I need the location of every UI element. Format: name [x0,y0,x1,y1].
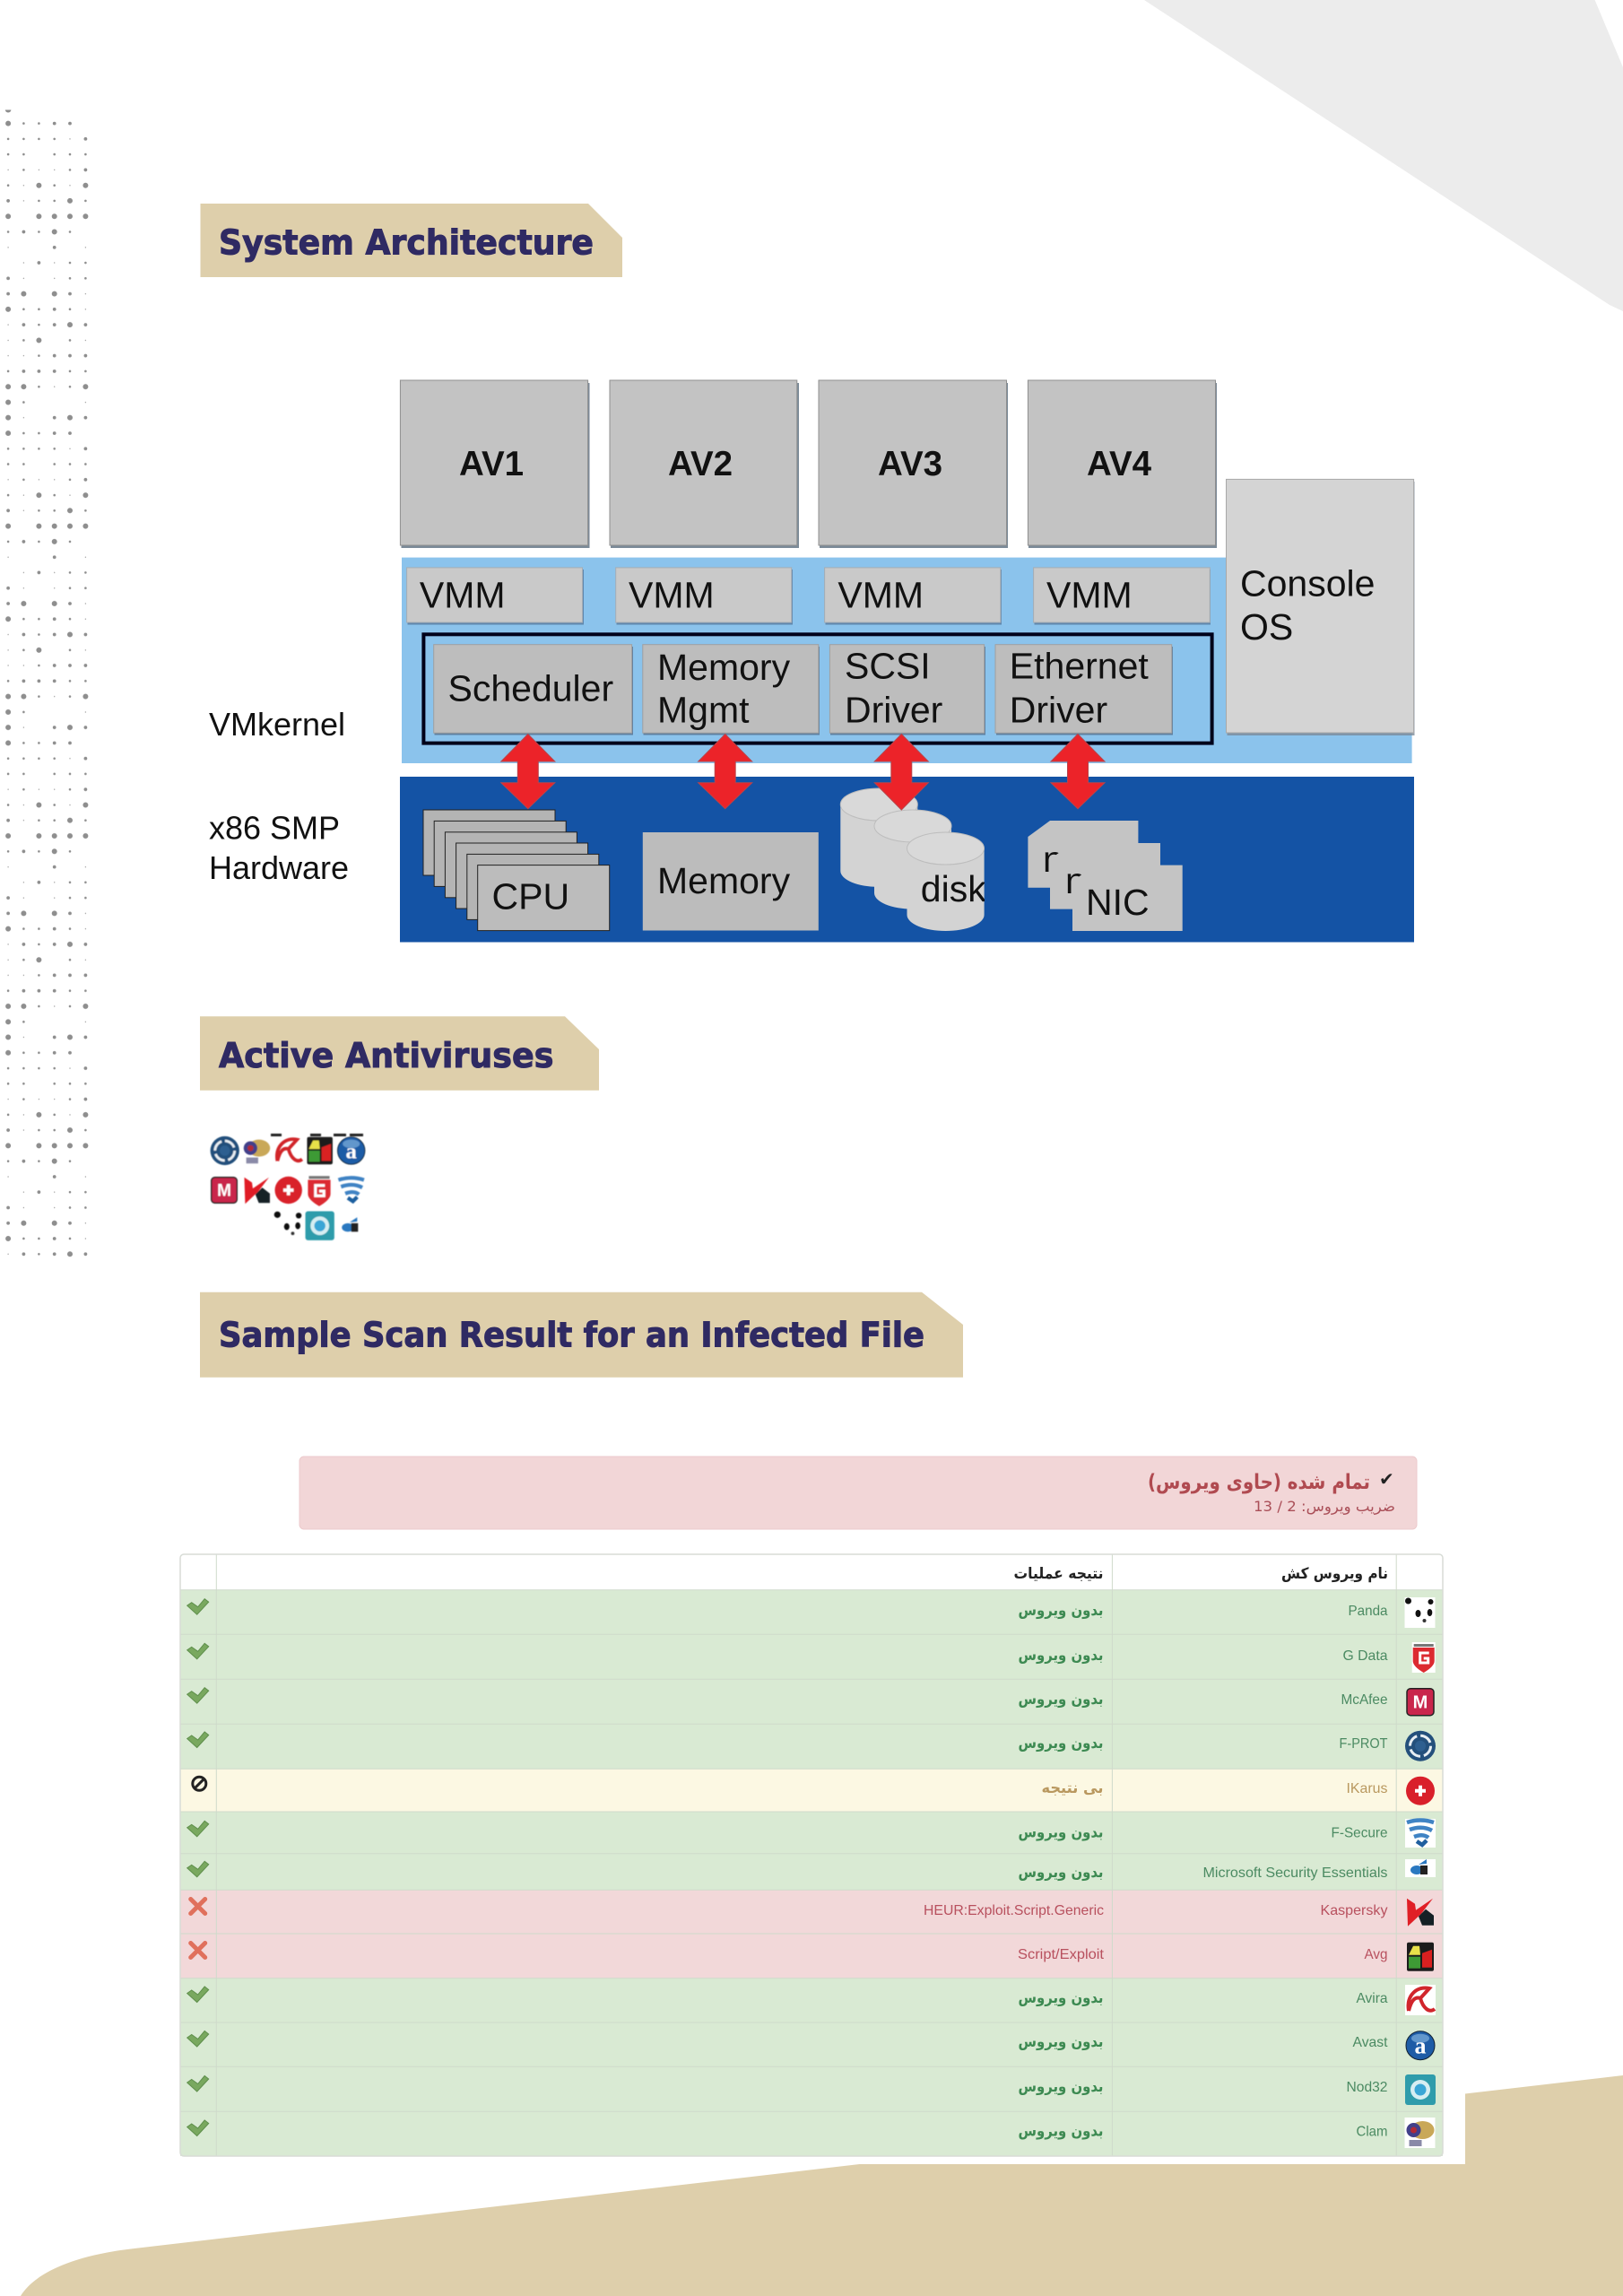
row: F-PROT [180,1724,1443,1769]
icon: disks [840,788,986,931]
icon: Avast: a [346,1140,357,1164]
icon: F-PROT [211,1136,239,1165]
heading: System Architecture: System Architecture [219,222,594,262]
alert: scan finished, virus found [299,1457,1417,1529]
alert: scan finished, virus found: ✔ [1379,1468,1394,1490]
icon: Avira [277,1139,302,1161]
row: Avg: Avg [1365,1947,1388,1962]
table header: نام ویروس کش [1281,1565,1388,1583]
box: Console OS: OS [1240,606,1293,648]
box: Memory Mgmt [643,645,820,735]
VMkernel black frame [423,634,1212,744]
box: VMM 3: VMM [838,574,924,615]
box: Memory [643,832,819,931]
box: Ethernet Driver: Driver [1010,689,1107,730]
icon: IKarus [274,1177,302,1204]
heading: Sample Scan Result for an Infected File [200,1292,963,1378]
row: Clam: بدون ویروس [1019,2122,1103,2140]
row: Avira: Avira [1356,1991,1388,2006]
icon: CPU stack [423,810,610,931]
row: Avira [180,1979,1443,2022]
row: F-PROT: F-PROT [1340,1736,1388,1752]
left labels [209,706,349,886]
box: AV3: AV3 [878,445,942,483]
box: Scheduler [434,645,633,735]
icon: Clam [244,1140,270,1163]
results table [180,1554,1443,2156]
arrow: SCSI driver to disk [874,734,928,810]
row: Avg: Script/Exploit [1018,1947,1105,1962]
box: Memory Mgmt: Memory [657,647,791,688]
row: Avast: بدون ویروس [1019,2033,1103,2051]
table header [180,1554,1443,1590]
icon: CPU stack: CPU [491,876,569,918]
box: VMM 2 [616,568,793,624]
box: VMM 3 [825,568,1002,624]
arrow: memory mgmt to memory [699,734,752,809]
decorative dot column [0,109,99,1260]
icon: Nod32 [306,1212,334,1240]
box: Scheduler: Scheduler [448,668,613,709]
box: SCSI Driver: Driver [845,689,942,730]
box: VMM 1: VMM [420,574,506,615]
icon: Avast [337,1137,365,1164]
row: Nod32: Nod32 [1347,2080,1388,2095]
row: F-Secure [180,1812,1443,1854]
row: Avast: Avast [1352,2035,1388,2050]
row: Panda: بدون ویروس [1019,1602,1103,1620]
left labels: x86 SMP [209,810,340,847]
alert: scan finished, virus found: تمام شده (حاوی ویروس) [1148,1471,1370,1494]
heading: Active Antiviruses: Active Antiviruses [219,1036,553,1075]
box: AV4 [1028,380,1217,548]
box: VMM 1 [407,568,584,624]
heading: Sample Scan Result for an Infected File: Sample Scan Result for an Infected File [219,1316,924,1355]
box: Memory: Memory [657,860,791,901]
icon: AVG [307,1137,333,1164]
row: Kaspersky: HEUR:Exploit.Script.Generic [924,1903,1104,1918]
row: McAfee: بدون ویروس [1019,1691,1103,1709]
row: IKarus [180,1769,1443,1812]
decorative gold bottom shape [21,2075,1623,2296]
box: AV4: AV4 [1087,445,1152,483]
row: Clam [180,2111,1443,2156]
box: Console OS [1227,479,1415,735]
row: Avg [180,1934,1443,1979]
row: Microsoft Security Essentials: Microsoft Security Essentials [1203,1866,1388,1881]
icon: G Data [308,1176,331,1206]
box: AV1 [400,380,590,548]
row: F-Secure: F-Secure [1331,1826,1388,1840]
box: VMM 2: VMM [629,574,715,615]
row: Nod32: بدون ویروس [1019,2078,1103,2096]
decorative grey corner shape [1144,0,1623,311]
heading: System Architecture [201,204,622,277]
box: VMM 4: VMM [1046,574,1133,615]
row: IKarus: IKarus [1347,1781,1388,1796]
icon: F-Secure [338,1178,364,1201]
icon: McAfee: M [217,1182,231,1201]
icon: McAfee [212,1178,237,1203]
row: Panda [180,1590,1443,1634]
left labels: VMkernel [209,706,345,743]
arrow: scheduler to CPU [501,734,555,809]
row: G Data: بدون ویروس [1019,1647,1103,1665]
row: Kaspersky: Kaspersky [1320,1903,1388,1918]
box: AV2: AV2 [668,445,733,483]
icon: NIC cards: n [1065,860,1086,901]
box: Memory Mgmt: Mgmt [657,689,750,730]
white table backing [170,1435,1465,2164]
row: G Data [180,1634,1443,1679]
icon: NIC cards [1028,821,1183,931]
icon: NIC cards: n [1043,839,1063,880]
box: SCSI Driver: SCSI [845,646,931,687]
icon: Microsoft Security Essentials [342,1217,358,1231]
antivirus logo collage [211,1134,365,1240]
row: Kaspersky [180,1890,1443,1934]
row: Avast: a [1415,2033,1426,2059]
box: AV3 [819,380,1008,548]
left labels: Hardware [209,849,349,886]
row: Avast [180,2022,1443,2066]
arrow: ethernet driver to NIC [1051,734,1105,809]
icon: Panda [274,1212,301,1235]
box: AV2 [610,380,799,548]
box: AV1: AV1 [459,445,524,483]
row: Nod32 [180,2066,1443,2111]
row: Avira: بدون ویروس [1019,1989,1103,2007]
panel: VMkernel light blue [402,558,1412,763]
icon: Kaspersky [244,1178,270,1204]
box: Console OS: Console [1240,563,1375,604]
table header: نتیجه عملیات [1013,1565,1103,1583]
icon: disks: disk [921,868,986,909]
architecture diagram [209,380,1415,942]
box: Ethernet Driver: Ethernet [1010,646,1149,687]
row: Clam: Clam [1356,2124,1388,2140]
row: McAfee: M [1413,1693,1428,1713]
alert: scan finished, virus found: ضریب ویروس: 2 / 13 [1254,1498,1395,1516]
row: F-Secure: بدون ویروس [1019,1824,1103,1842]
box: SCSI Driver [829,645,985,735]
heading: Active Antiviruses [200,1016,599,1091]
row: Panda: Panda [1349,1604,1388,1619]
row: Microsoft Security Essentials: بدون ویروس [1019,1864,1103,1882]
clipped top row fragments [271,1134,363,1136]
row: F-PROT: بدون ویروس [1019,1735,1103,1752]
row: G Data: G Data [1343,1648,1388,1664]
row: Microsoft Security Essentials [180,1854,1443,1890]
box: VMM 4 [1034,568,1211,624]
icon: NIC cards: NIC [1086,882,1150,923]
panel: hardware dark blue [400,777,1414,942]
box: Ethernet Driver [995,645,1173,735]
row: McAfee [180,1679,1443,1724]
row: McAfee: McAfee [1341,1692,1388,1708]
row: IKarus: بی نتیجه [1042,1779,1103,1797]
